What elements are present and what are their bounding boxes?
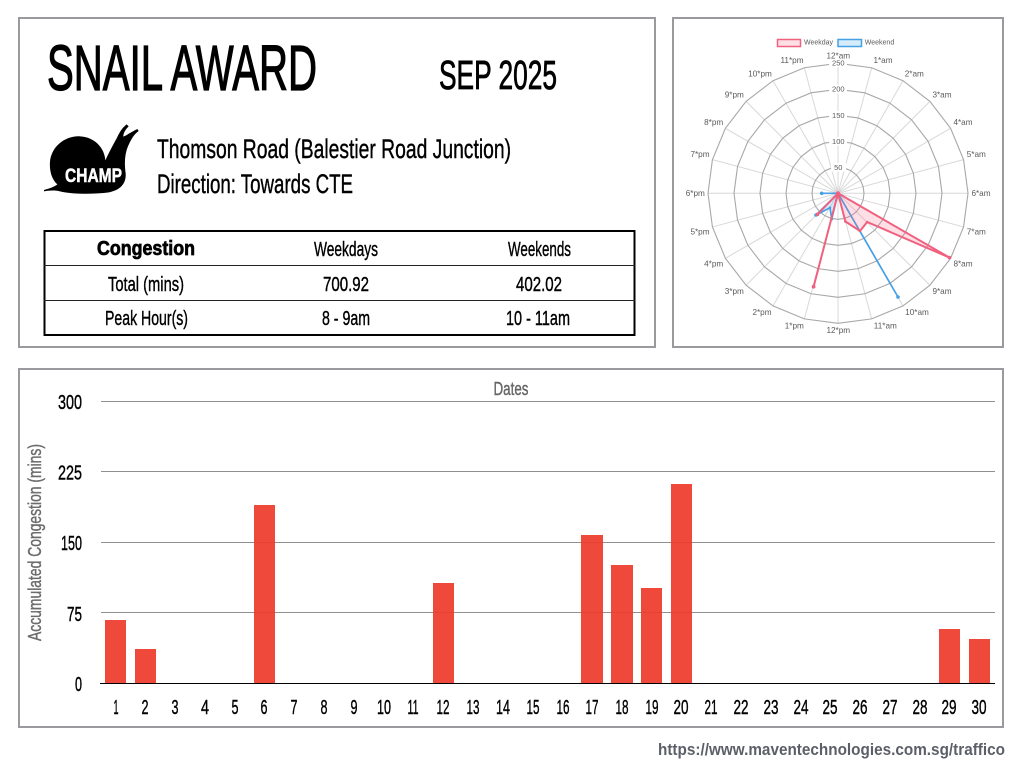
radar hour labels: 4*pm <box>704 260 723 268</box>
x axis labels: 25 <box>822 697 838 719</box>
radar hour labels: 2*pm <box>752 308 772 317</box>
radar hour labels: 7*pm <box>690 150 710 159</box>
radar legend: Weekend <box>865 40 894 46</box>
radar hour labels: 1*pm <box>785 322 804 330</box>
congestion table: Weekends <box>508 239 571 261</box>
congestion table: Peak Hour(s) <box>105 308 188 330</box>
radar scale ticks: 100 <box>832 137 845 146</box>
radar scale ticks: 50 <box>834 163 842 172</box>
panel: award summary <box>19 18 655 347</box>
x axis labels: 3 <box>172 697 178 719</box>
location name: Thomson Road (Balestier Road Junction) <box>157 134 511 164</box>
x axis labels: 17 <box>586 697 598 719</box>
icon: snail champ: CHAMP <box>65 166 122 187</box>
radar hour labels: 8*pm <box>704 118 723 127</box>
x axis labels: 2 <box>142 697 148 719</box>
radar hour labels: 5*pm <box>690 228 710 236</box>
weekend series <box>814 192 900 299</box>
date heading: SEP 2025 <box>439 52 557 98</box>
radar hour labels <box>686 52 991 335</box>
y axis labels: 300 <box>58 392 82 414</box>
congestion table: Total (mins) <box>108 274 184 296</box>
radar legend: Weekday <box>804 40 834 46</box>
x axis labels: 13 <box>466 697 480 719</box>
y axis labels: 225 <box>58 462 82 484</box>
radar hour labels: 3*pm <box>725 287 744 296</box>
radar hour labels: 11*am <box>874 322 897 330</box>
x axis labels: 5 <box>232 697 238 719</box>
y axis title: Accumulated Congestion (mins) <box>25 444 45 641</box>
radar hour labels: 6*pm <box>686 189 705 198</box>
radar hour labels: 12*am <box>826 52 850 60</box>
x axis labels: 22 <box>734 697 748 719</box>
congestion table: 8 - 9am <box>322 308 370 330</box>
x axis labels: 7 <box>290 697 298 719</box>
x axis labels: 28 <box>912 697 928 719</box>
y axis labels: 150 <box>61 533 82 555</box>
bars <box>105 484 990 683</box>
congestion table: 10 - 11am <box>506 308 570 330</box>
x axis labels: 16 <box>556 697 570 719</box>
radar hour labels: 2*am <box>905 70 924 78</box>
x axis labels: 6 <box>260 697 268 719</box>
radar hour labels: 10*pm <box>748 70 772 78</box>
x axis labels <box>114 697 986 719</box>
x axis labels: 20 <box>674 697 688 719</box>
x axis labels: 24 <box>794 697 808 719</box>
congestion table: Congestion <box>97 238 195 260</box>
radar hour labels: 8*am <box>953 260 973 268</box>
radar scale ticks: 250 <box>832 58 845 67</box>
direction: Direction: Towards CTE <box>157 169 353 199</box>
x axis labels: 14 <box>496 697 510 719</box>
x axis labels: 15 <box>526 697 540 719</box>
panel: daily congestion bar chart <box>19 369 1003 727</box>
radar hour labels: 1*am <box>873 56 893 65</box>
x axis labels: 4 <box>201 697 209 719</box>
x axis labels: 21 <box>704 697 718 719</box>
x axis title: Dates <box>494 379 528 399</box>
radar hour labels: 5*am <box>967 150 986 159</box>
x axis labels: 19 <box>646 697 658 719</box>
radar grid <box>708 63 968 323</box>
congestion table: Weekdays <box>314 239 378 261</box>
congestion table: 700.92 <box>323 274 369 296</box>
y axis labels <box>58 392 82 696</box>
x axis labels: 1 <box>114 697 118 719</box>
x axis labels: 27 <box>882 697 898 719</box>
radar scale ticks <box>829 58 847 172</box>
x axis labels: 8 <box>320 697 328 719</box>
radar hour labels: 9*am <box>932 287 952 296</box>
radar hour labels: 3*am <box>932 90 952 100</box>
radar hour labels: 11*pm <box>780 56 804 65</box>
radar hour labels: 9*pm <box>725 90 744 100</box>
x axis labels: 23 <box>764 697 778 719</box>
radar hour labels: 12*pm <box>826 326 850 335</box>
radar hour labels: 4*am <box>953 118 973 127</box>
x axis labels: 11 <box>408 697 418 719</box>
radar scale ticks: 200 <box>832 85 845 94</box>
congestion table <box>44 231 635 335</box>
title: SNAIL AWARD <box>47 32 317 104</box>
x axis labels: 29 <box>942 697 956 719</box>
icon: snail champ <box>44 124 139 194</box>
y axis labels: 0 <box>75 674 82 696</box>
radar hour labels: 10*am <box>905 308 929 317</box>
x axis labels: 10 <box>377 697 391 719</box>
radar hour labels: 7*am <box>967 228 986 236</box>
radar scale ticks: 150 <box>832 111 845 120</box>
x axis labels: 26 <box>852 697 868 719</box>
y axis labels: 75 <box>67 604 82 626</box>
weekday series <box>812 191 951 289</box>
x axis labels: 30 <box>972 697 986 719</box>
panel: hourly radar chart <box>673 18 1003 347</box>
x axis labels: 12 <box>436 697 450 719</box>
x axis labels: 9 <box>350 697 358 719</box>
x axis labels: 18 <box>616 697 628 719</box>
congestion table: 402.02 <box>516 274 562 296</box>
radar legend <box>778 40 894 46</box>
radar hour labels: 6*am <box>971 189 991 198</box>
